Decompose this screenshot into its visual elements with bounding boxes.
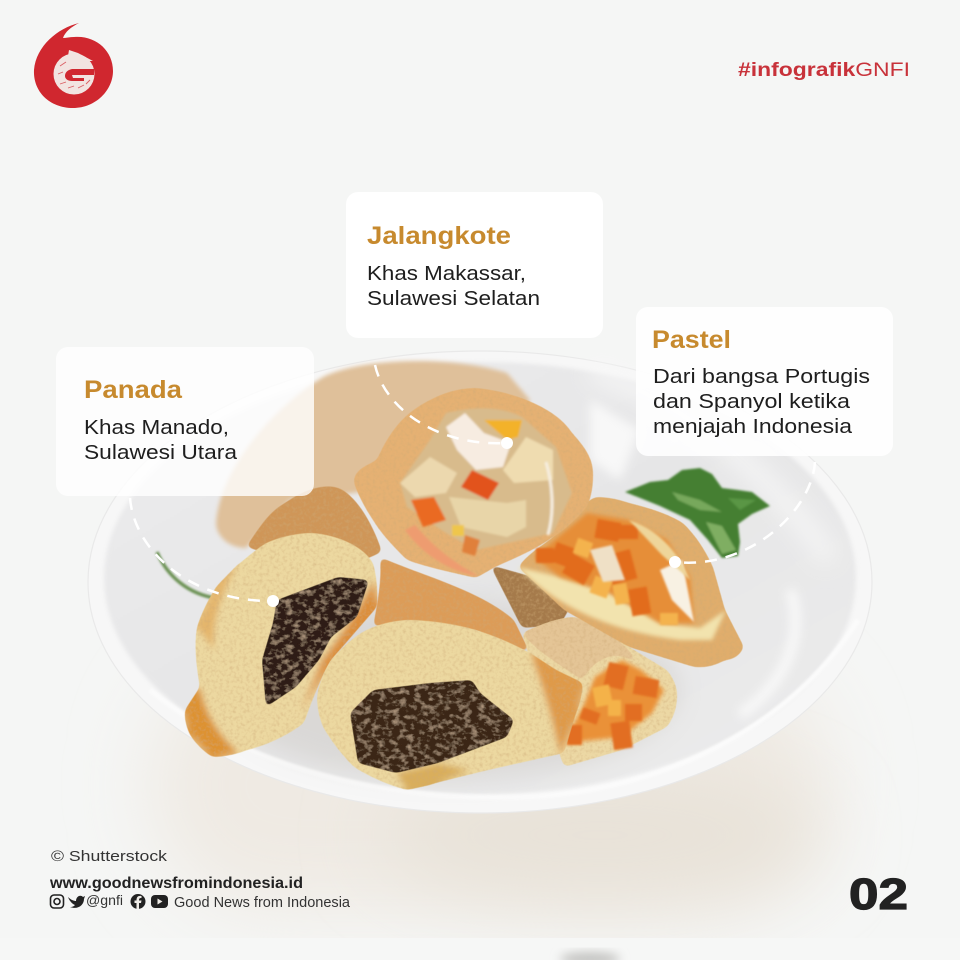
description: Pastel: menjajah Indonesia — [653, 416, 853, 438]
card: Panada — [56, 347, 314, 496]
title: Panada: Panada — [84, 376, 183, 404]
panada front — [317, 620, 583, 790]
website: www.goodnewsfromindonesia.id — [49, 875, 303, 892]
panada left — [185, 533, 377, 757]
page number: 02 — [849, 870, 908, 919]
photo credit: © Shutterstock — [51, 848, 168, 865]
back pastel pale — [216, 361, 530, 548]
greens — [157, 436, 770, 598]
title: Jalangkote: Jalangkote — [367, 222, 511, 250]
icon: youtube — [151, 895, 168, 908]
social row — [50, 893, 351, 911]
handle: @gnfi — [86, 893, 123, 908]
pastel lower with carrot filling — [522, 617, 677, 767]
card: Pastel — [636, 307, 893, 456]
brown pieces under — [246, 486, 580, 628]
icon: twitter — [68, 896, 85, 908]
table shadow — [0, 660, 960, 960]
plate — [88, 351, 872, 813]
dashed line: jalangkote — [375, 365, 507, 443]
logo — [34, 23, 113, 108]
description: Panada: Khas Manado, — [84, 417, 229, 439]
description: Pastel: dan Spanyol ketika — [653, 391, 851, 413]
jalangkote — [354, 388, 593, 578]
card: Jalangkote — [346, 192, 603, 338]
description: Jalangkote: Khas Makassar, — [367, 263, 526, 285]
icon: facebook — [130, 894, 146, 909]
dot: jalangkote — [501, 437, 513, 449]
page name: Good News from Indonesia — [174, 894, 351, 911]
dot: panada — [267, 595, 279, 607]
description: Pastel: Dari bangsa Portugis — [653, 366, 870, 388]
title: Pastel: Pastel — [652, 326, 731, 354]
hashtag: #infografik GNFI — [738, 59, 910, 81]
pastel right with carrot filling — [518, 497, 744, 667]
dashed line: pastel — [675, 462, 815, 563]
description: Jalangkote: Sulawesi Selatan — [367, 288, 540, 310]
icon: instagram — [50, 895, 64, 908]
description: Panada: Sulawesi Utara — [84, 442, 238, 464]
panada center crust — [373, 557, 530, 653]
dashed line: panada — [130, 498, 273, 601]
dot: pastel — [669, 556, 681, 568]
